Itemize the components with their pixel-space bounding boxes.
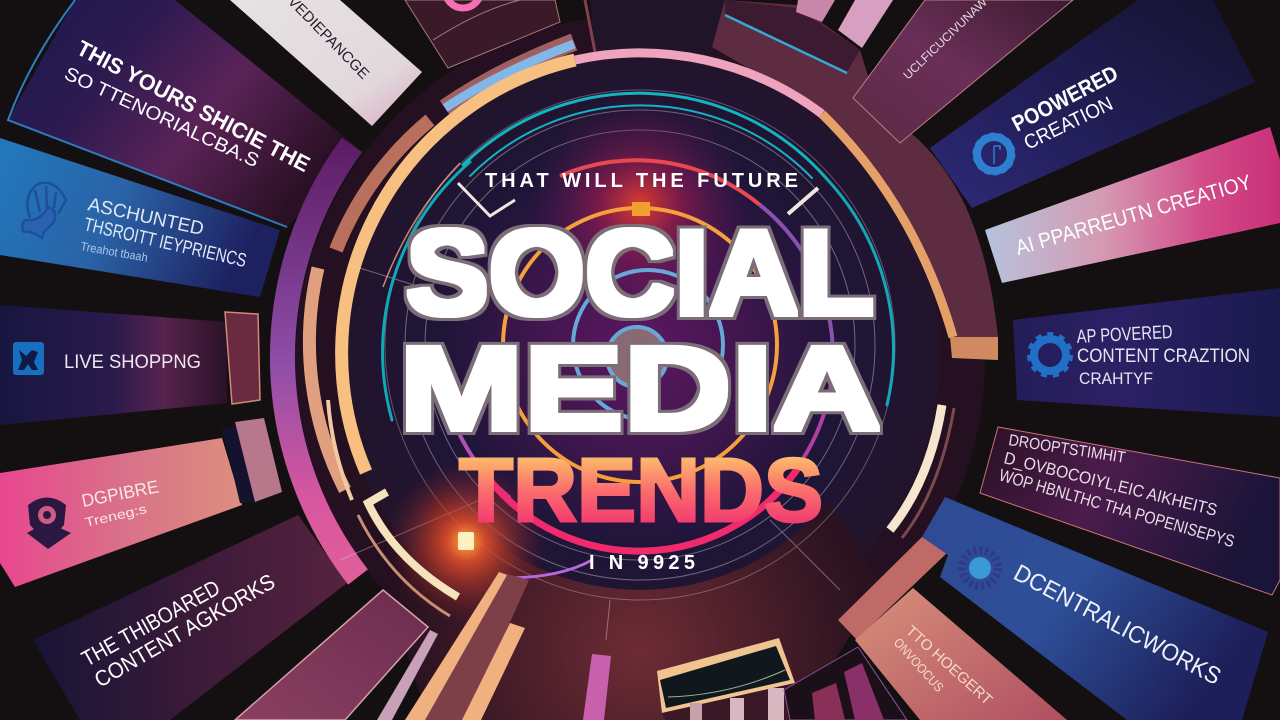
panel: live shopping: [0, 305, 260, 425]
text: powered: POOWERED: [1008, 60, 1122, 136]
central disc: [340, 57, 940, 657]
text: markets line one: DROOPTSTIMHIT: [1007, 432, 1127, 467]
text: creation: CREATION: [1021, 93, 1117, 155]
grid lines: [340, 90, 895, 640]
text: blue panel small line: Treahot tbaah: [79, 239, 149, 265]
text: pink panel sub: Treneg:s: [83, 501, 149, 530]
panel: top-left purple: [8, 0, 363, 227]
top centre dark strip: [590, 0, 725, 60]
arc: blue ring: [573, 270, 723, 420]
tan bar at end of arc: [950, 337, 998, 360]
icon: gear: [974, 134, 1014, 174]
subtitle: in year: I N 9925: [589, 552, 695, 574]
yellow top marker: [632, 202, 650, 216]
icon: webcam: [27, 498, 71, 549]
salmon arc piece: [838, 537, 947, 640]
text: markets line three: WOP HBNLTHC THA POPENISEPYS: [997, 466, 1237, 551]
text: decentralized: DCENTRALICWORKS: [1009, 559, 1225, 691]
icon: blue gear: [1029, 334, 1071, 376]
text: tan sub: ONVOOCUS: [891, 635, 947, 695]
bar: pink vertical: [583, 654, 611, 720]
tab: pink panel side: [222, 418, 282, 503]
text: blue panel heading: ASCHUNTED: [86, 194, 206, 240]
top divider line: [585, 0, 595, 52]
bar: thin blue-pink bottom left: [377, 630, 438, 720]
text: markets line two: D_OVBOCOIYL,EIC AIKHEITS: [1002, 448, 1219, 520]
icon: blue sun: [962, 550, 998, 586]
text: live shopping label: LIVE SHOPPNG: [64, 352, 201, 373]
text: panel subheading: SO TTENORIALCBA.S: [61, 63, 262, 172]
light: bottom left lamp: [458, 532, 474, 550]
arc: orange right ring: [822, 114, 953, 337]
bracket: top left: [458, 183, 515, 216]
text: crahtyf: CRAHTYF: [1079, 369, 1153, 388]
arc: orange ring: [503, 208, 777, 482]
text: content creation: CONTENT CRAZTION: [1077, 346, 1250, 367]
panel: dark purple markets: [980, 427, 1280, 595]
glow: bottom left: [386, 462, 546, 622]
bottom maroon glow: [400, 486, 880, 720]
bar: second tan bottom: [462, 623, 525, 720]
panel: content networks: [33, 515, 347, 720]
text: blue panel line: THSROITT IEYPRIENCS: [82, 214, 248, 272]
panel: blue experiences: [0, 138, 280, 297]
arc: inner red-purple-pink ring: [452, 160, 833, 551]
cream arc right: [890, 405, 954, 538]
arc: teal ring: [383, 93, 893, 420]
text: content panel line two: CONTENT AGKORKS: [90, 569, 279, 692]
title: media: MEDIA: [399, 323, 881, 455]
panel: pink trends: [0, 418, 282, 587]
panel: dark maroon top right: [853, 0, 1073, 143]
icon: live shopping: [13, 342, 44, 375]
text: panel heading: THIS YOURS SHICIE THE: [73, 35, 314, 177]
panel: white top-left card: [230, 0, 422, 126]
arc: blue highlight: [445, 42, 574, 108]
panel: powered creation: [930, 0, 1255, 208]
bracket: top right: [788, 188, 818, 214]
arc: purple-pink side band: [282, 145, 358, 577]
icon: blue shell: [22, 183, 66, 238]
panel: ai powered content: [1013, 288, 1280, 417]
title: trends: TRENDS: [459, 441, 823, 541]
arc: purple lower left trail: [505, 560, 592, 578]
bar: tan maroon bottom left: [405, 572, 529, 720]
panel: tan bottom right: [855, 588, 1067, 720]
top right pink stripes: [796, 0, 893, 48]
arc: tan main ring: [342, 60, 575, 472]
text: tan heading: TTO HOEGERT: [902, 622, 995, 709]
top box with pink ring: [405, 0, 560, 68]
title: social: SOCIAL: [406, 206, 874, 340]
panel: pink ai creation: [985, 127, 1280, 283]
text: ai label: AI PPARREUTN CREATIOY: [1013, 171, 1254, 260]
text: content panel line one: THE THIBOARED: [77, 575, 224, 671]
arc: pink main ring: [575, 53, 822, 114]
cream bracket bottom left: [358, 492, 458, 616]
box: right maroon stripes: [784, 647, 907, 720]
text: ap powered: AP POVERED: [1076, 322, 1173, 348]
panel: bottom left pink: [235, 590, 428, 720]
maroon ring backdrop: [295, 15, 985, 705]
top right maroon arc panel: [712, 0, 998, 337]
panel: decentralized networks: [922, 497, 1268, 720]
glow: top red: [520, 100, 760, 300]
box: dark bottom panel: [657, 638, 800, 720]
arc: inner blue ring: [607, 327, 667, 387]
arc: copper scratches: [309, 120, 460, 500]
title: that will the future: THAT WILL THE FUTURE: [485, 170, 798, 192]
text: pink panel heading: DGPIBRE: [80, 476, 160, 511]
tab: live shopping side: [225, 312, 260, 404]
